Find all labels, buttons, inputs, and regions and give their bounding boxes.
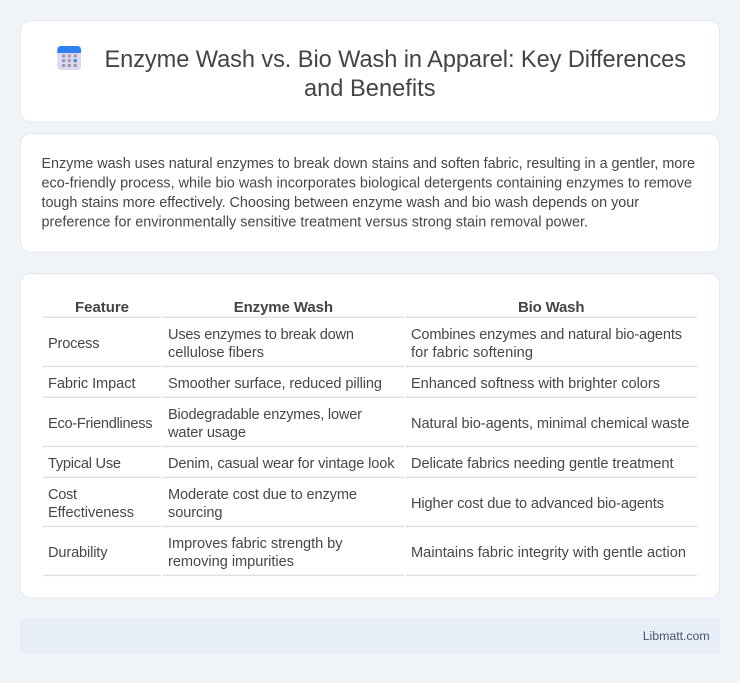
row: fabric impact [43,376,697,398]
table header row: Feature [75,299,129,316]
title: and Benefits [304,76,436,102]
panel: introduction text: tough stains more effectively. Choosing between enzyme wash and bio wash depends on your [42,195,639,211]
row: eco-friendliness: water usage [167,425,246,441]
row: cost effectiveness [43,487,697,527]
row: typical use: Typical Use [48,456,121,472]
row: cost effectiveness: Moderate cost due to enzyme [168,487,357,503]
row: process: Uses enzymes to break down [168,327,354,343]
row: fabric impact: Enhanced softness with brighter colors [411,376,660,392]
panel: introduction text: eco-friendly process, while bio wash incorporates biological detergents containing enzymes to remove [42,176,692,192]
panel: comparison table [20,274,720,598]
table header row: Enzyme Wash [234,299,333,316]
panel: introduction text: Enzyme wash uses natural enzymes to break down stains and soften fabric, resulting in a gentler, more [42,156,695,172]
title [104,47,686,102]
icon: calendar [57,46,81,70]
row: durability: removing impurities [168,554,294,570]
title: Enzyme Wash vs. Bio Wash in Apparel: Key Differences [104,47,686,73]
row: eco-friendliness [43,407,697,447]
panel: introduction text [20,134,720,252]
row: durability: Durability [48,545,108,561]
row: process: cellulose fibers [168,345,264,361]
row: typical use [43,456,697,478]
row: cost effectiveness: Cost [48,487,77,503]
row: process: Process [48,336,100,352]
panel: introduction text: preference for environmentally sensitive treatment versus strong stain removal power. [42,214,588,230]
row: fabric impact: Fabric Impact [48,376,136,392]
footer [20,619,720,653]
row: typical use: Delicate fabrics needing gentle treatment [411,456,674,472]
row: durability: Improves fabric strength by [168,536,343,552]
row: process: for fabric softening [411,345,533,361]
table header row [43,299,697,318]
row: eco-friendliness: Biodegradable enzymes, lower [168,407,362,423]
row: typical use: Denim, casual wear for vintage look [168,456,395,472]
panel: header [20,20,720,122]
row: process [43,327,697,367]
row: durability [43,536,697,576]
footer: Libmatt.com [643,629,710,643]
row: cost effectiveness: Effectiveness [48,505,134,521]
row: cost effectiveness: sourcing [168,505,222,521]
row: durability: Maintains fabric integrity with gentle action [411,545,686,561]
row: fabric impact: Smoother surface, reduced pilling [168,376,382,392]
row: eco-friendliness: Natural bio-agents, minimal chemical waste [411,416,690,432]
table header row: Bio Wash [518,299,584,316]
row: process: Combines enzymes and natural bio-agents [411,327,682,343]
row: cost effectiveness: Higher cost due to advanced bio-agents [411,496,664,512]
row: eco-friendliness: Eco-Friendliness [48,416,152,432]
